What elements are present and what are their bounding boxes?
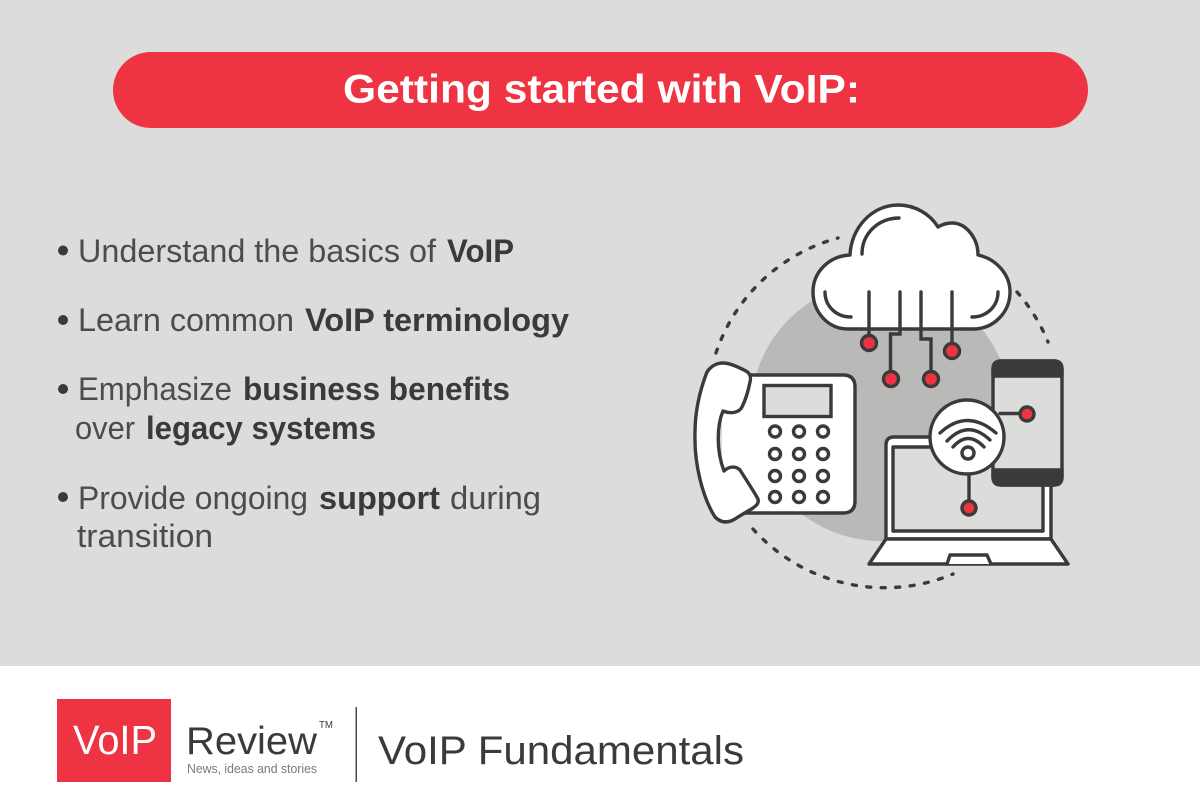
icon: wifi badge <box>930 400 1004 474</box>
title banner <box>113 52 1088 128</box>
icon: cloud <box>813 205 1010 329</box>
bullet: learn terminology: VoIP terminology <box>305 302 569 338</box>
connector: wifi to smartphone <box>1000 407 1034 421</box>
bullet: understand the basics: Understand the basics of <box>78 233 436 269</box>
bullet: business benefits: business benefits <box>243 371 510 407</box>
title: Getting started with VoIP: <box>343 68 860 112</box>
bullet: business benefits <box>58 371 510 446</box>
icon: laptop <box>869 437 1068 564</box>
bullet list <box>58 233 569 554</box>
logo: VoIP Review: TM <box>319 720 333 731</box>
grey backdrop circle <box>751 281 1011 541</box>
bullet: learn terminology: Learn common <box>78 302 294 338</box>
icon: desk phone <box>695 363 855 522</box>
icon: smartphone <box>993 361 1062 485</box>
illustration: VoIP connected devices <box>695 205 1068 588</box>
phone display <box>764 386 831 416</box>
logo: VoIP Review <box>57 699 333 782</box>
logo: VoIP Review: VoIP <box>73 717 157 763</box>
bullet: ongoing support: Provide ongoing <box>78 480 308 516</box>
bullet: ongoing support: during <box>450 480 541 516</box>
footer <box>0 666 1200 807</box>
handset <box>695 363 758 522</box>
bullet: ongoing support <box>58 480 541 554</box>
footer heading: VoIP Fundamentals <box>378 729 744 773</box>
bullet: business benefits: legacy systems <box>146 410 376 446</box>
cloud network lines and nodes <box>862 292 960 386</box>
bullet: understand the basics: VoIP <box>447 233 514 269</box>
keypad <box>770 426 828 502</box>
bullet: business benefits: over <box>75 410 135 446</box>
phone base <box>722 375 855 513</box>
bullet: ongoing support: support <box>319 480 440 516</box>
dotted orbit ring <box>716 238 1048 588</box>
logo: VoIP Review: Review <box>186 720 318 763</box>
connector: wifi to laptop <box>962 472 976 515</box>
bullet: learn terminology <box>58 302 569 338</box>
bullet: ongoing support: transition <box>77 518 213 554</box>
logo: VoIP Review: News, ideas and stories <box>187 762 317 776</box>
bullet: business benefits: Emphasize <box>78 371 232 407</box>
